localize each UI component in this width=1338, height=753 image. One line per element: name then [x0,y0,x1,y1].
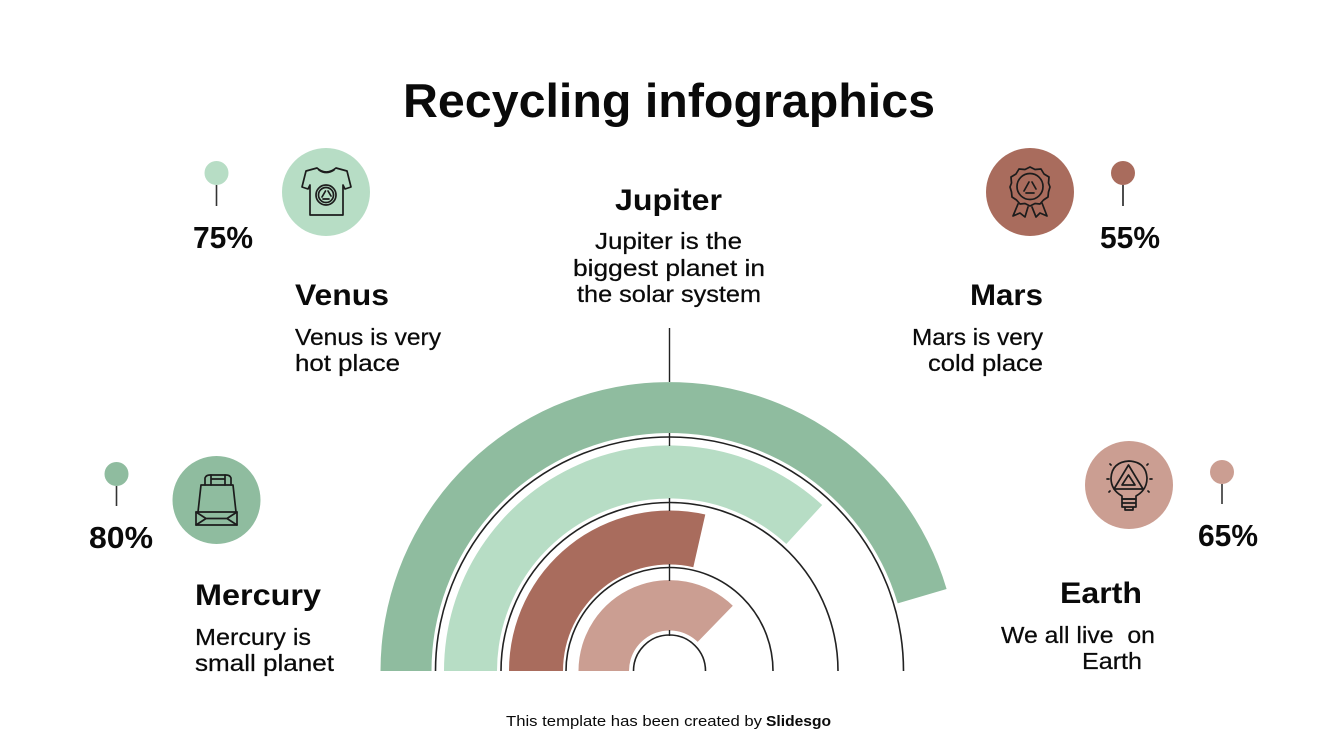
text: mercury description: Mercury is [195,624,311,650]
text: jupiter description: biggest planet in [573,255,765,281]
text: jupiter description [573,228,765,307]
heading: jupiter: Jupiter [615,184,722,217]
text: mercury description [195,624,335,676]
icon: t-shirt with recycling symbol [282,148,370,236]
text: jupiter description: Jupiter is the [595,228,742,254]
percentage: venus: 75% [193,220,253,255]
bar: mercury 80% [380,382,947,671]
icon: recycling award rosette [986,148,1074,236]
percentage: mars: 55% [1100,220,1160,255]
text: mars description [912,324,1044,376]
ring lines [436,433,904,671]
footer credit: Slidesgo [766,714,831,730]
icon: shopping bag [172,456,260,544]
panel: earth [1001,441,1258,674]
footer credit: This template has been created by [506,714,763,730]
heading: mars: Mars [970,279,1043,312]
panel: venus [193,148,442,376]
text: venus description [295,324,442,376]
pin: mercury [104,462,128,506]
percentage: mercury: 80% [89,520,153,555]
bar: venus 75% [444,445,822,671]
pin: mars [1111,161,1135,206]
pin: venus [204,161,228,206]
heading: earth: Earth [1060,577,1142,610]
panel: jupiter [573,184,765,307]
bar: mars 55% [509,510,705,671]
connector line: jupiter to chart [668,328,670,382]
title: Recycling infographics [403,74,935,127]
text: mercury description: small planet [195,650,335,676]
text: mars description: Mars is very [912,324,1044,350]
panel: mercury [89,456,335,676]
text: earth description: Earth [1082,648,1142,674]
text: earth description: We all live on [1001,622,1155,648]
bar: earth 65% [578,580,733,671]
chart: radial progress bars [380,328,947,671]
pin: earth [1210,460,1234,504]
text: jupiter description: the solar system [577,281,761,307]
icon: recycling light bulb [1085,441,1173,529]
heading: mercury: Mercury [195,579,321,612]
text: earth description [1001,622,1155,674]
text: venus description: Venus is very [295,324,442,350]
percentage: earth: 65% [1198,518,1258,553]
text: mars description: cold place [928,350,1043,376]
text: venus description: hot place [295,350,400,376]
panel: mars [912,148,1160,376]
heading: venus: Venus [295,279,389,312]
